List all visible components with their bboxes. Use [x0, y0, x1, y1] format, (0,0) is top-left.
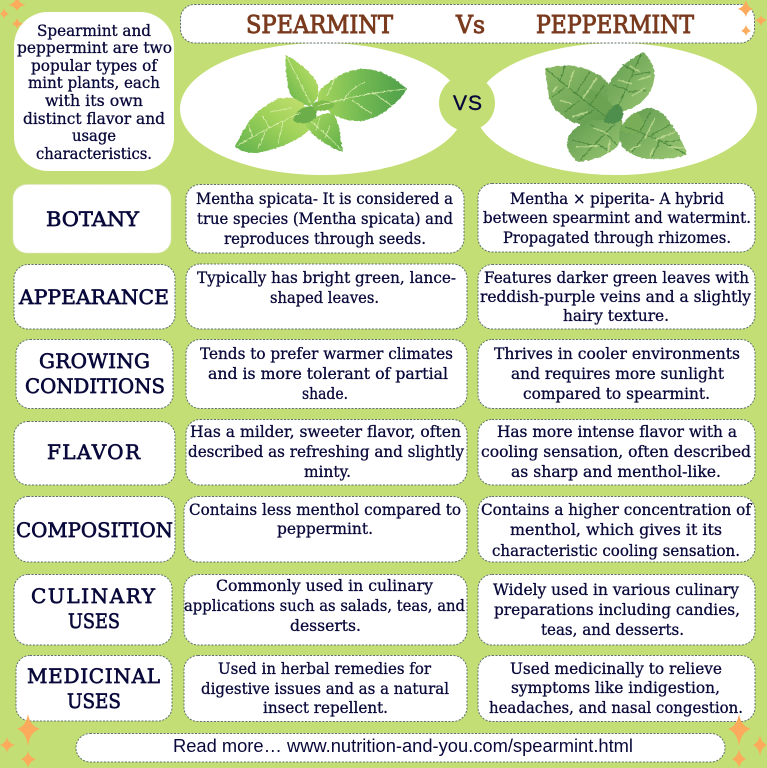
culinary uses: spearmint: Commonly used in culinary — [216, 576, 433, 595]
row label: culinary uses — [14, 574, 172, 645]
composition: peppermint: characteristic cooling sensation. — [492, 541, 740, 560]
composition: peppermint: menthol, which gives it its — [510, 520, 722, 539]
row label: medicinal uses: MEDICINAL — [27, 664, 160, 688]
botany: spearmint: Mentha spicata- It is considered a — [196, 189, 453, 208]
row label: composition: COMPOSITION — [16, 518, 173, 542]
intro text panel: distinct flavor and — [23, 109, 165, 128]
intro text panel — [14, 12, 174, 171]
image panel: peppermint ellipse — [475, 43, 757, 175]
culinary uses: spearmint: applications such as salads, teas, and — [184, 596, 465, 615]
growing conditions: spearmint — [186, 340, 467, 408]
botany: peppermint — [478, 184, 755, 252]
row label: botany: BOTANY — [46, 207, 140, 231]
row label: growing conditions: CONDITIONS — [25, 374, 165, 398]
row label: growing conditions — [16, 340, 173, 408]
composition: peppermint: Contains a higher concentration of — [481, 500, 752, 519]
flavor: spearmint — [186, 420, 467, 485]
icon: sparkles top right — [738, 0, 767, 36]
row label: medicinal uses — [16, 656, 172, 721]
culinary uses: peppermint: Widely used in various culinary — [493, 580, 739, 599]
flavor: spearmint: minty. — [304, 462, 351, 481]
row label: culinary uses: CULINARY — [31, 584, 156, 608]
row label: botany — [13, 184, 171, 253]
medicinal uses: peppermint — [478, 656, 755, 722]
VS badge: VS — [453, 92, 482, 115]
icon: spearmint sprig — [235, 55, 407, 153]
heading: vs: Vs — [455, 11, 485, 39]
icon: sparkles top left — [0, 0, 26, 29]
footer: read more link — [76, 734, 725, 762]
botany: spearmint: reproduces through seeds. — [224, 229, 426, 248]
flavor: peppermint: Has more intense flavor with a — [497, 422, 737, 441]
appearance: peppermint: reddish-purple veins and a slightly — [480, 287, 751, 306]
botany: peppermint: Mentha × piperita- A hybrid — [510, 189, 724, 208]
growing conditions: peppermint: compared to spearmint. — [523, 384, 710, 403]
medicinal uses: spearmint: digestive issues and as a natural — [201, 679, 449, 698]
medicinal uses: peppermint: Used medicinally to relieve — [510, 659, 722, 678]
botany: peppermint: Propagated through rhizomes. — [503, 228, 731, 247]
row label: growing conditions: GROWING — [39, 349, 150, 373]
composition: spearmint: Contains less menthol compared to — [189, 500, 461, 519]
composition: spearmint — [184, 496, 467, 562]
row label: composition — [14, 496, 175, 562]
title bar — [180, 4, 754, 43]
intro text panel: usage — [72, 126, 116, 145]
appearance: spearmint: shaped leaves. — [270, 288, 379, 307]
appearance: peppermint: hairy texture. — [563, 306, 669, 325]
row label: appearance — [14, 264, 175, 329]
flavor: peppermint: as sharp and menthol-like. — [511, 462, 721, 481]
icon: peppermint sprig — [545, 52, 687, 162]
appearance: spearmint: Typically has bright green, lance- — [197, 268, 456, 287]
medicinal uses: spearmint — [184, 656, 467, 722]
image panel: spearmint ellipse — [180, 43, 464, 175]
flavor: spearmint: Has a milder, sweeter flavor, often — [190, 422, 461, 441]
botany: spearmint: true species (Mentha spicata) and — [197, 209, 453, 228]
growing conditions: peppermint: Thrives in cooler environments — [494, 344, 740, 363]
intro text panel: with its own — [45, 91, 143, 110]
row label: appearance: APPEARANCE — [18, 285, 169, 309]
flavor: peppermint: cooling sensation, often described — [481, 442, 751, 461]
intro text panel: characteristics. — [36, 144, 152, 163]
appearance: peppermint — [478, 264, 755, 329]
botany: peppermint: between spearmint and watermint. — [483, 208, 751, 227]
intro text panel: peppermint are two — [17, 38, 172, 57]
intro text panel: popular types of — [31, 56, 158, 75]
intro text panel: mint plants, each — [28, 73, 160, 92]
medicinal uses: peppermint: headaches, and nasal congestion. — [489, 698, 743, 717]
culinary uses: spearmint — [184, 574, 467, 645]
culinary uses: peppermint: teas, and desserts. — [541, 620, 684, 639]
footer: read more link: Read more… www.nutrition-and-you.com/spearmint.html — [173, 736, 633, 756]
culinary uses: peppermint: preparations including candies, — [494, 600, 740, 619]
row label: culinary uses: USES — [68, 609, 120, 633]
culinary uses: peppermint — [478, 574, 755, 645]
flavor: spearmint: described as refreshing and slightly — [188, 442, 464, 461]
medicinal uses: spearmint: insect repellent. — [263, 698, 388, 717]
culinary uses: spearmint: desserts. — [290, 616, 361, 635]
flavor: peppermint — [478, 420, 755, 485]
growing conditions: peppermint: and requires more sunlight — [511, 364, 725, 383]
composition: spearmint: peppermint. — [277, 519, 373, 538]
growing conditions: peppermint — [478, 340, 755, 408]
row label: flavor: FLAVOR — [47, 440, 141, 464]
botany: spearmint — [186, 184, 464, 253]
composition: peppermint — [478, 496, 755, 562]
growing conditions: spearmint: shade. — [302, 384, 348, 403]
intro text panel: Spearmint and — [37, 21, 151, 40]
heading: peppermint: PEPPERMINT — [536, 11, 694, 39]
appearance: spearmint — [186, 264, 467, 329]
heading: spearmint: SPEARMINT — [246, 11, 393, 39]
VS badge — [439, 75, 495, 131]
growing conditions: spearmint: and is more tolerant of partial — [208, 364, 448, 383]
appearance: peppermint: Features darker green leaves with — [484, 268, 749, 287]
icon: sparkles bottom right — [728, 714, 767, 768]
growing conditions: spearmint: Tends to prefer warmer climates — [200, 344, 453, 363]
medicinal uses: peppermint: symptoms like indigestion, — [511, 678, 720, 697]
row label: medicinal uses: USES — [67, 689, 121, 713]
row label: flavor — [14, 422, 175, 485]
icon: sparkles bottom left — [0, 714, 40, 768]
medicinal uses: spearmint: Used in herbal remedies for — [218, 659, 431, 678]
